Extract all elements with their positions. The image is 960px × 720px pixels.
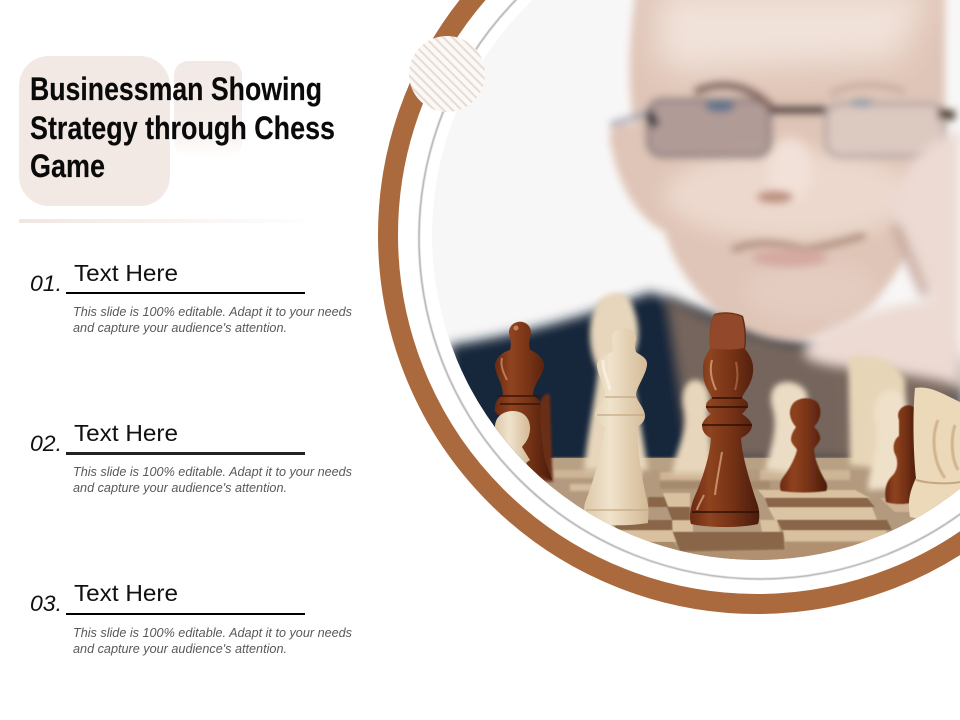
decorative rounded square small bbox=[174, 61, 242, 157]
item 01: 01. bbox=[30, 271, 62, 296]
title bbox=[30, 71, 335, 184]
item 03: and capture your audience's attention. bbox=[73, 641, 287, 656]
item 02: Text Here bbox=[74, 420, 178, 446]
item 02: 02. bbox=[30, 431, 62, 456]
title: Businessman Showing bbox=[30, 71, 322, 107]
chessboard bbox=[520, 456, 960, 560]
wall background bbox=[420, 0, 960, 580]
dark king bbox=[690, 312, 759, 527]
item 02: This slide is 100% editable. Adapt it to your needs bbox=[73, 464, 352, 479]
striped decorative circle bbox=[409, 36, 485, 112]
item 03: This slide is 100% editable. Adapt it to your needs bbox=[73, 625, 352, 640]
item 03 bbox=[30, 580, 352, 656]
item 01: Text Here bbox=[74, 260, 178, 286]
white pawn left bbox=[495, 411, 530, 464]
hand on cheek bbox=[803, 130, 960, 385]
item 03: Text Here bbox=[74, 580, 178, 606]
brown outer ring bbox=[388, 0, 960, 604]
title: Game bbox=[30, 148, 105, 184]
dark pawn centre right bbox=[780, 398, 827, 492]
photo: businessman playing chess bbox=[420, 0, 960, 580]
blurred background pieces bbox=[584, 293, 908, 490]
white knight right bbox=[909, 387, 960, 521]
decorative rounded square large bbox=[19, 56, 170, 206]
white queen bbox=[584, 328, 648, 525]
dark queen left bbox=[495, 322, 553, 482]
dark pawn right bbox=[885, 405, 918, 504]
title divider bbox=[19, 219, 321, 223]
item 01 bbox=[30, 260, 352, 335]
item 03: 03. bbox=[30, 591, 62, 616]
title: Strategy through Chess bbox=[30, 110, 335, 146]
item 02: and capture your audience's attention. bbox=[73, 480, 287, 495]
item 01: This slide is 100% editable. Adapt it to your needs bbox=[73, 304, 352, 319]
glasses bbox=[610, 85, 955, 156]
item 01: and capture your audience's attention. bbox=[73, 320, 287, 335]
white inner ring with shadow line bbox=[419, 0, 960, 579]
man: blurred figure bbox=[450, 0, 960, 480]
item 02 bbox=[30, 420, 352, 495]
